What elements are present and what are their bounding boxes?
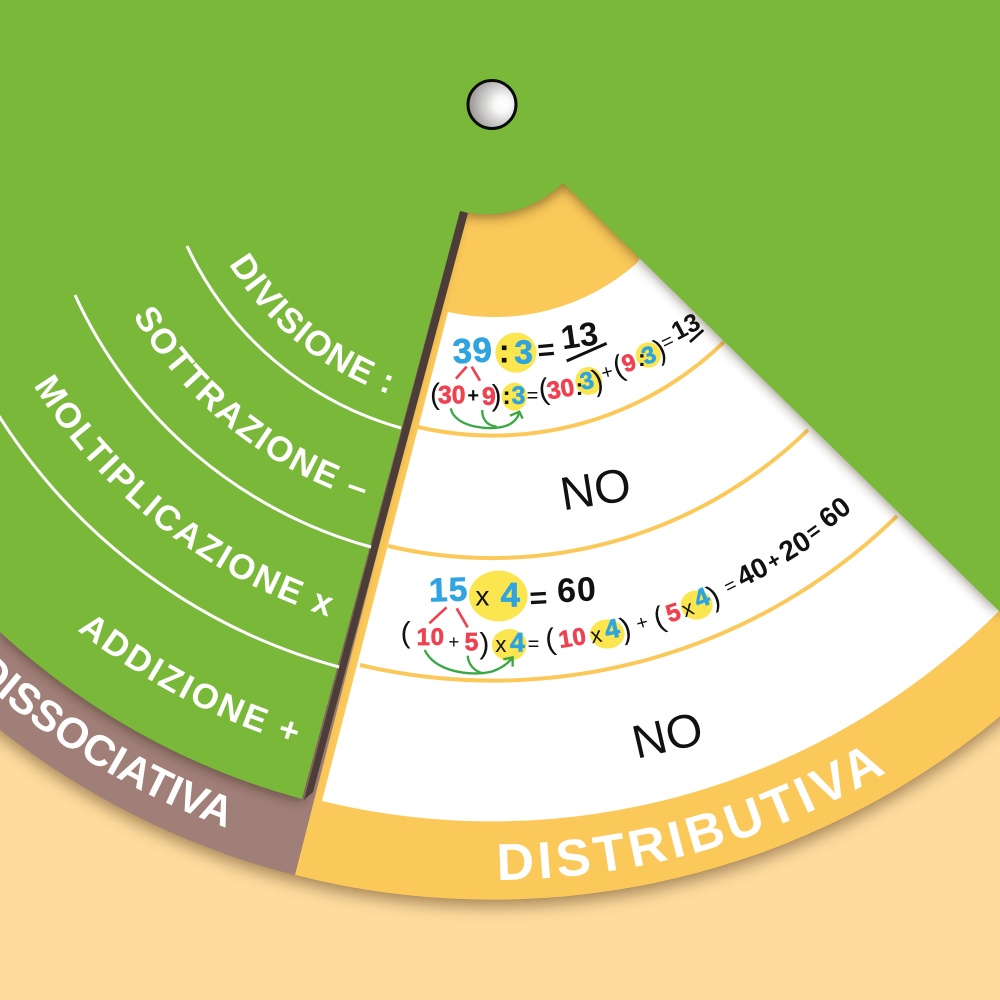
row: multiplication example: ( (543, 623, 558, 657)
row: multiplication example: x (495, 632, 506, 657)
row: multiplication example: ) (479, 627, 489, 660)
row: division example: = (658, 330, 678, 354)
row: multiplication example: = (528, 634, 539, 656)
decomposition lines (429, 607, 468, 627)
label: divisione: DIVISIONE : (230, 252, 392, 393)
label: sottrazione: SOTTRAZIONE – (136, 307, 366, 494)
label: moltiplicazione: MOLTIPLICAZIONE x (34, 374, 334, 616)
row: multiplication example: + (634, 611, 651, 635)
row: multiplication example (401, 490, 857, 673)
row dividers (0, 246, 401, 667)
row: division example: : (576, 374, 583, 400)
row: multiplication example: x (475, 581, 489, 612)
row: division example: 9 (618, 349, 640, 378)
row: division example: = (536, 333, 556, 368)
row: multiplication example: 40 (731, 551, 773, 593)
row: multiplication example: = (529, 581, 548, 616)
second line: ( (430, 378, 440, 411)
dark edge of green cover (304, 211, 468, 800)
green arrows (425, 650, 513, 673)
row: division example: ) (492, 379, 502, 412)
row: multiplication example: 60 (556, 570, 598, 610)
row: division example: 9 (482, 384, 496, 411)
shadow of green cover (0, 183, 1000, 806)
row: multiplication example: 10 (557, 623, 589, 654)
first line: 15 (428, 571, 469, 610)
row: multiplication example: 10 (417, 624, 445, 651)
label: addizione: ADDIZIONE + (78, 616, 298, 740)
highlight circles (469, 571, 713, 661)
row: multiplication example: = (721, 575, 741, 598)
second line: ( (401, 617, 411, 650)
row: division example: + (467, 385, 479, 407)
row: multiplication example: ( (649, 601, 669, 635)
row: division example: 3 (578, 367, 596, 396)
row: division example: 3 (638, 341, 660, 371)
row: division example (430, 308, 705, 428)
row: division example: : (499, 334, 510, 371)
answer: first NO: NO (556, 457, 634, 520)
row: multiplication example: x (678, 595, 697, 622)
row: division example: 3 (512, 383, 525, 410)
row: multiplication example: ) (617, 612, 635, 646)
row: division example: ) (589, 364, 607, 398)
row: division example: + (599, 360, 616, 385)
row: multiplication example: 4 (510, 627, 525, 657)
green arrows (451, 408, 523, 428)
row: multiplication example: x (589, 622, 604, 648)
row: multiplication example: + (448, 631, 459, 652)
row: multiplication example: 4 (602, 613, 623, 645)
row: division example: ( (609, 350, 628, 384)
row: multiplication example: 5 (663, 598, 684, 628)
row: division example: = (527, 385, 538, 407)
answer: second NO: NO (627, 701, 708, 769)
row: multiplication example: 60 (813, 490, 857, 534)
first line: 39 (452, 331, 494, 371)
panel: yellow distributiva sector (295, 183, 1000, 900)
row: multiplication example: + (762, 547, 785, 574)
row: division example: ) (650, 333, 671, 367)
highlight circles (495, 333, 661, 411)
row: multiplication example: 4 (501, 576, 521, 614)
decomposition lines (456, 367, 480, 381)
row separators (360, 342, 897, 681)
row: multiplication example: 5 (465, 630, 479, 657)
row: division example: : (502, 382, 511, 410)
row: division example: 30 (545, 374, 576, 405)
row: multiplication example: = (801, 518, 826, 545)
row: division example: 30 (438, 382, 465, 409)
row: division example: 13 (667, 308, 705, 346)
row: division example: 13 (559, 315, 600, 357)
icon: pivot rivet (468, 80, 516, 128)
white answer area (322, 250, 1000, 821)
row: division example: ( (536, 373, 551, 407)
label: distributiva: DISTRIBUTIVA (499, 748, 886, 880)
row: division example: : (638, 345, 646, 371)
row: multiplication example: ) (703, 580, 725, 614)
row: multiplication example: 4 (689, 581, 714, 614)
panel: green cover wheel (0, 0, 1000, 799)
row: multiplication example: 20 (773, 525, 816, 567)
row: division example: 3 (514, 334, 533, 371)
